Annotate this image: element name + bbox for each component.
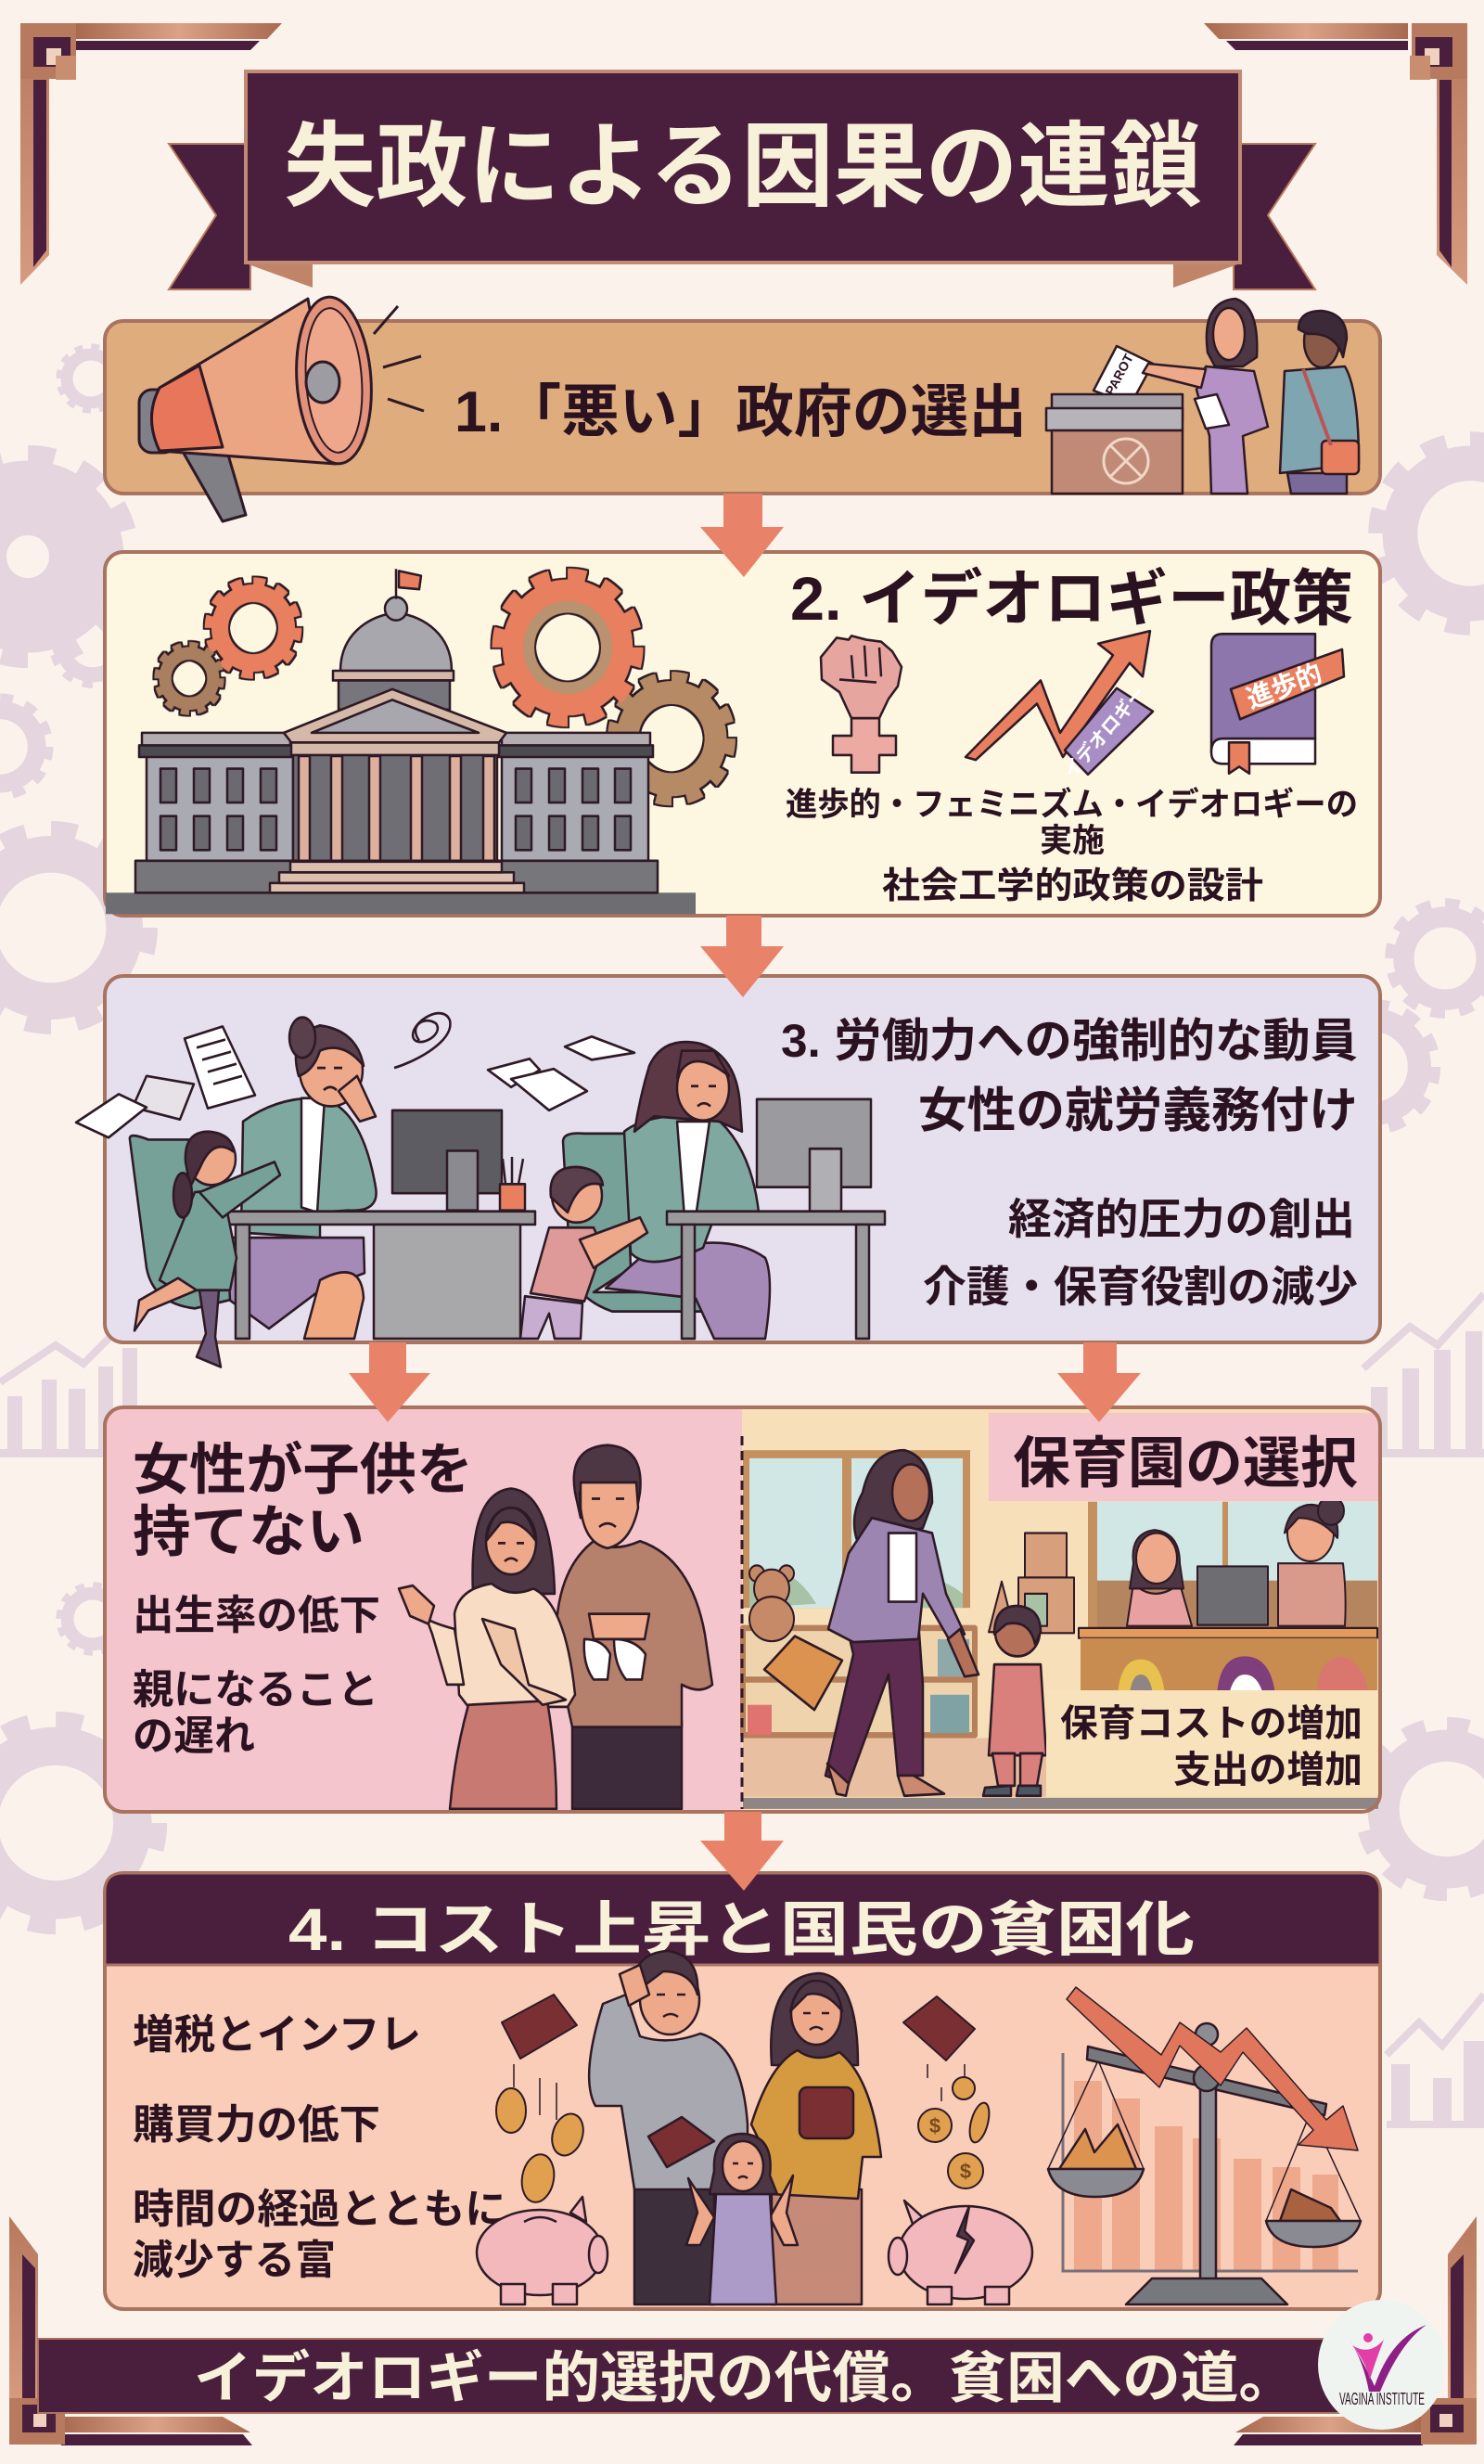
- left text: cannot have children: 出生率の低下: [133, 1593, 380, 1638]
- teddy bear: [749, 1565, 794, 1641]
- panel 2: ideology: [105, 552, 1380, 916]
- footer text: イデオロギー的選択の代償。貧困への道。: [194, 2347, 1297, 2409]
- heading 4: 4. コスト上昇と国民の貧困化: [288, 1896, 1195, 1963]
- panel 4: childbirth and daycare split: [105, 1407, 1380, 1812]
- illustration: family in distress: [589, 1951, 881, 2304]
- logo badge: [1318, 2300, 1446, 2430]
- icon: progressive book: 進歩的: [1243, 659, 1326, 715]
- illustration: gears: [157, 575, 730, 800]
- text box: daycare heading: [989, 1413, 1380, 1501]
- heading 1: 1.「悪い」政府の選出: [454, 380, 1027, 444]
- illustration: falling wallets and coins: $: [929, 2114, 940, 2137]
- girl pulling mother: [134, 1132, 280, 1367]
- list of effects: 減少する富: [133, 2238, 336, 2283]
- panel 3 text: 介護・保育役割の減少: [923, 1263, 1358, 1311]
- panel 1: election: [105, 321, 1380, 494]
- left text: cannot have children: の遅れ: [133, 1713, 255, 1759]
- illustration: ballot box and voters: PAROT: [1102, 351, 1136, 398]
- boy clinging to mother: [520, 1167, 647, 1339]
- panel 2 body text: 進歩的・フェミニズム・イデオロギーの: [786, 786, 1358, 823]
- panel 2 body text: 社会工学的政策の設計: [882, 866, 1263, 906]
- title text: 失政による因果の連鎖: [284, 115, 1202, 219]
- text box: daycare costs: [1046, 1690, 1378, 1795]
- panel 4 outline and divider: [105, 1407, 1380, 1812]
- heading 2: 2. イデオロギー政策: [790, 564, 1353, 633]
- illustration: falling wallets and coins: $: [960, 2160, 971, 2183]
- arrow: panel 3 to childless branch: [349, 1342, 430, 1422]
- illustration: ballot box and voters: [1046, 299, 1359, 494]
- arrow: falling trend: [1067, 1987, 1358, 2150]
- illustration: piggy banks: [477, 2197, 1032, 2304]
- left text: cannot have children: 持てない: [133, 1501, 365, 1563]
- staff behind counter: [1127, 1584, 1192, 1626]
- left text: cannot have children: 親になること: [133, 1667, 378, 1713]
- reception window and counter: [1088, 1502, 1377, 1581]
- panel 3 text: 経済的圧力の創出: [1008, 1195, 1355, 1243]
- icon: raised fist with female symbol: [821, 635, 902, 773]
- panel 3 text: 女性の就労義務付け: [918, 1084, 1358, 1138]
- illustration: megaphone: [139, 294, 424, 521]
- arrow: panel 3 to daycare branch: [1057, 1342, 1141, 1422]
- icon: rising zigzag arrow with tag: [966, 631, 1153, 783]
- panel 3 text: 3. 労働力への強制的な動員: [781, 1015, 1358, 1067]
- illustration: falling wallets and coins: [496, 1995, 992, 2205]
- illustration: daycare room: [743, 1450, 1378, 1809]
- flying papers: [76, 1013, 634, 1137]
- illustration: worried couple: [399, 1445, 712, 1809]
- chart: falling bars: [1063, 2053, 1358, 2271]
- text box: daycare costs: 保育コストの増加: [1060, 1703, 1362, 1744]
- corner ornament: bottom left: [9, 2216, 252, 2445]
- left text: cannot have children: 女性が子供を: [133, 1439, 473, 1501]
- toy castle: [1018, 1534, 1074, 1633]
- list of effects: [133, 2012, 506, 2283]
- illustration: unbalanced scale: [1048, 2023, 1361, 2304]
- corner ornament: bottom right: [1234, 2216, 1477, 2445]
- left text: cannot have children: [133, 1439, 473, 1759]
- text box: daycare costs: 支出の増加: [1173, 1750, 1362, 1790]
- list of effects: 時間の経過とともに: [133, 2187, 506, 2232]
- illustration: capitol building: [106, 569, 696, 914]
- list of effects: 購買力の低下: [133, 2102, 380, 2148]
- icon: rising zigzag arrow with tag: イデオロギー: [1059, 682, 1150, 783]
- corner ornament: top left: [20, 23, 282, 285]
- panel 2 body text: [786, 786, 1358, 906]
- text box: daycare heading: 保育園の選択: [1013, 1432, 1358, 1495]
- panel 3 text: [781, 1015, 1358, 1311]
- corner ornament: top right: [1204, 23, 1467, 285]
- panel 5: rising costs and poverty: [105, 1873, 1380, 2309]
- footer banner: [38, 2339, 1406, 2413]
- second woman at desk: [563, 1042, 885, 1339]
- panel 3: labor mobilization: [105, 976, 1380, 1342]
- list of effects: 増税とインフレ: [133, 2012, 421, 2058]
- illustration: mother walking child: [764, 1450, 1046, 1796]
- title banner: [169, 71, 1315, 289]
- illustration: stressed working mothers: [76, 1013, 885, 1367]
- arrow: panel 1 to 2: [700, 494, 784, 577]
- background gears and charts: [0, 346, 1484, 2128]
- panel 2 body text: 実施: [1040, 823, 1105, 859]
- arrow: panel 4 to 5: [700, 1812, 784, 1891]
- arrow: panel 2 to 3: [700, 916, 784, 997]
- first woman at desk: [130, 1018, 535, 1339]
- icon: progressive book: [1211, 634, 1344, 774]
